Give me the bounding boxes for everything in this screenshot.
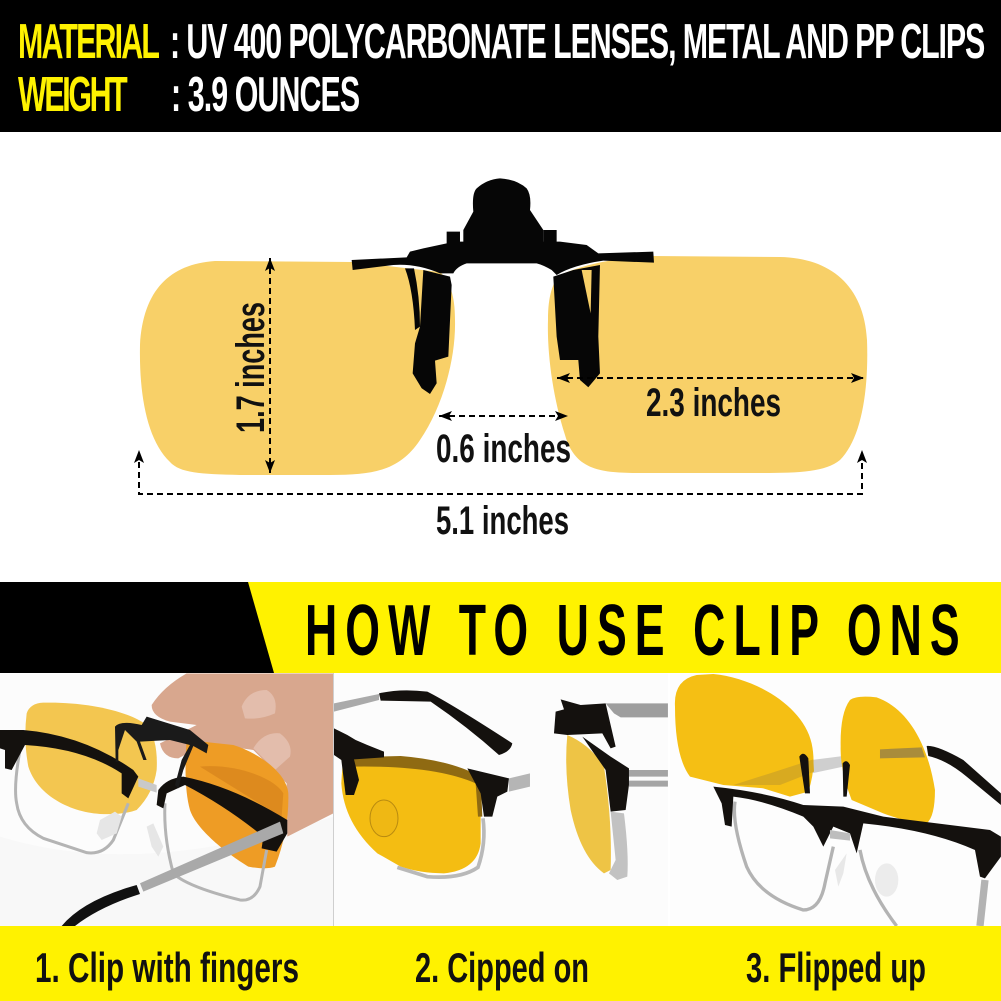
panel: material and weight specs bbox=[0, 0, 1001, 132]
lens bbox=[341, 758, 481, 873]
nose pads bbox=[97, 812, 163, 857]
side view clip bbox=[554, 699, 616, 748]
bridge bbox=[830, 830, 850, 841]
clip pegs bbox=[799, 754, 850, 797]
lens top brow bbox=[344, 756, 482, 817]
arrow: bridge 0.6 inches bbox=[439, 415, 568, 417]
right clip arms bbox=[553, 265, 600, 387]
side view temple bbox=[606, 703, 668, 717]
arrow: overall width 5.1 inches bbox=[134, 450, 867, 494]
frame end piece bbox=[467, 768, 509, 817]
side view frame bbox=[582, 737, 629, 812]
panel: step captions bbox=[0, 926, 1001, 1001]
label: 0.6 inches: 0.6 inches bbox=[436, 427, 571, 471]
caption: step 2: 2. Cipped on bbox=[415, 944, 589, 991]
caption: step 3: 3. Flipped up bbox=[746, 944, 926, 991]
temple arm bbox=[334, 694, 379, 712]
rear arm bbox=[509, 773, 530, 792]
label: weight: WEIGHT bbox=[18, 67, 128, 122]
arrow: lens width 2.3 inches bbox=[557, 377, 864, 379]
silver rims bbox=[734, 802, 985, 926]
grey temple between lenses bbox=[812, 756, 843, 773]
photo: clipped on bbox=[334, 690, 668, 880]
temple arm bbox=[140, 822, 283, 892]
label: 2.3 inches: 2.3 inches bbox=[646, 381, 781, 425]
nose pads bbox=[875, 863, 898, 897]
clip bbox=[115, 717, 208, 788]
arrow: height 1.7 inches bbox=[269, 258, 271, 473]
black temple tip bbox=[927, 746, 1001, 805]
right lens bbox=[548, 256, 867, 473]
panel: how to use banner bbox=[0, 582, 1001, 673]
divider bbox=[333, 673, 334, 926]
frame rims bbox=[16, 750, 267, 900]
right lens flipped bbox=[841, 697, 935, 823]
left clip arms bbox=[405, 268, 420, 330]
photo: flipped up bbox=[670, 673, 1001, 926]
heading: HOW TO USE CLIP ONS bbox=[305, 590, 960, 671]
nose pad bbox=[370, 800, 398, 837]
value: material: : UV 400 POLYCARBONATE LENSES, METAL AND PP CLIPS bbox=[170, 14, 985, 69]
label: 5.1 inches: 5.1 inches bbox=[436, 499, 569, 543]
clip frame bbox=[352, 178, 654, 394]
bridge bbox=[138, 778, 157, 793]
caption: step 1: 1. Clip with fingers bbox=[35, 944, 299, 991]
left lens flipped bbox=[675, 674, 814, 797]
panel: lens dimensions diagram bbox=[134, 178, 867, 543]
left lens bbox=[25, 703, 157, 814]
label: 1.7 inches: 1.7 inches bbox=[229, 302, 273, 433]
clip bbox=[334, 728, 384, 795]
frame brows bbox=[0, 730, 287, 852]
silver rim bbox=[397, 818, 484, 877]
side view lens bbox=[566, 735, 611, 873]
side view mesh arm bbox=[609, 812, 628, 880]
hand bbox=[152, 673, 333, 837]
photo: clip with fingers bbox=[0, 673, 333, 926]
frame brow bbox=[713, 787, 1001, 878]
value: weight: : 3.9 OUNCES bbox=[171, 67, 360, 122]
label: material: MATERIAL bbox=[18, 14, 160, 69]
right lens bbox=[186, 740, 288, 868]
left lens bbox=[140, 261, 455, 475]
